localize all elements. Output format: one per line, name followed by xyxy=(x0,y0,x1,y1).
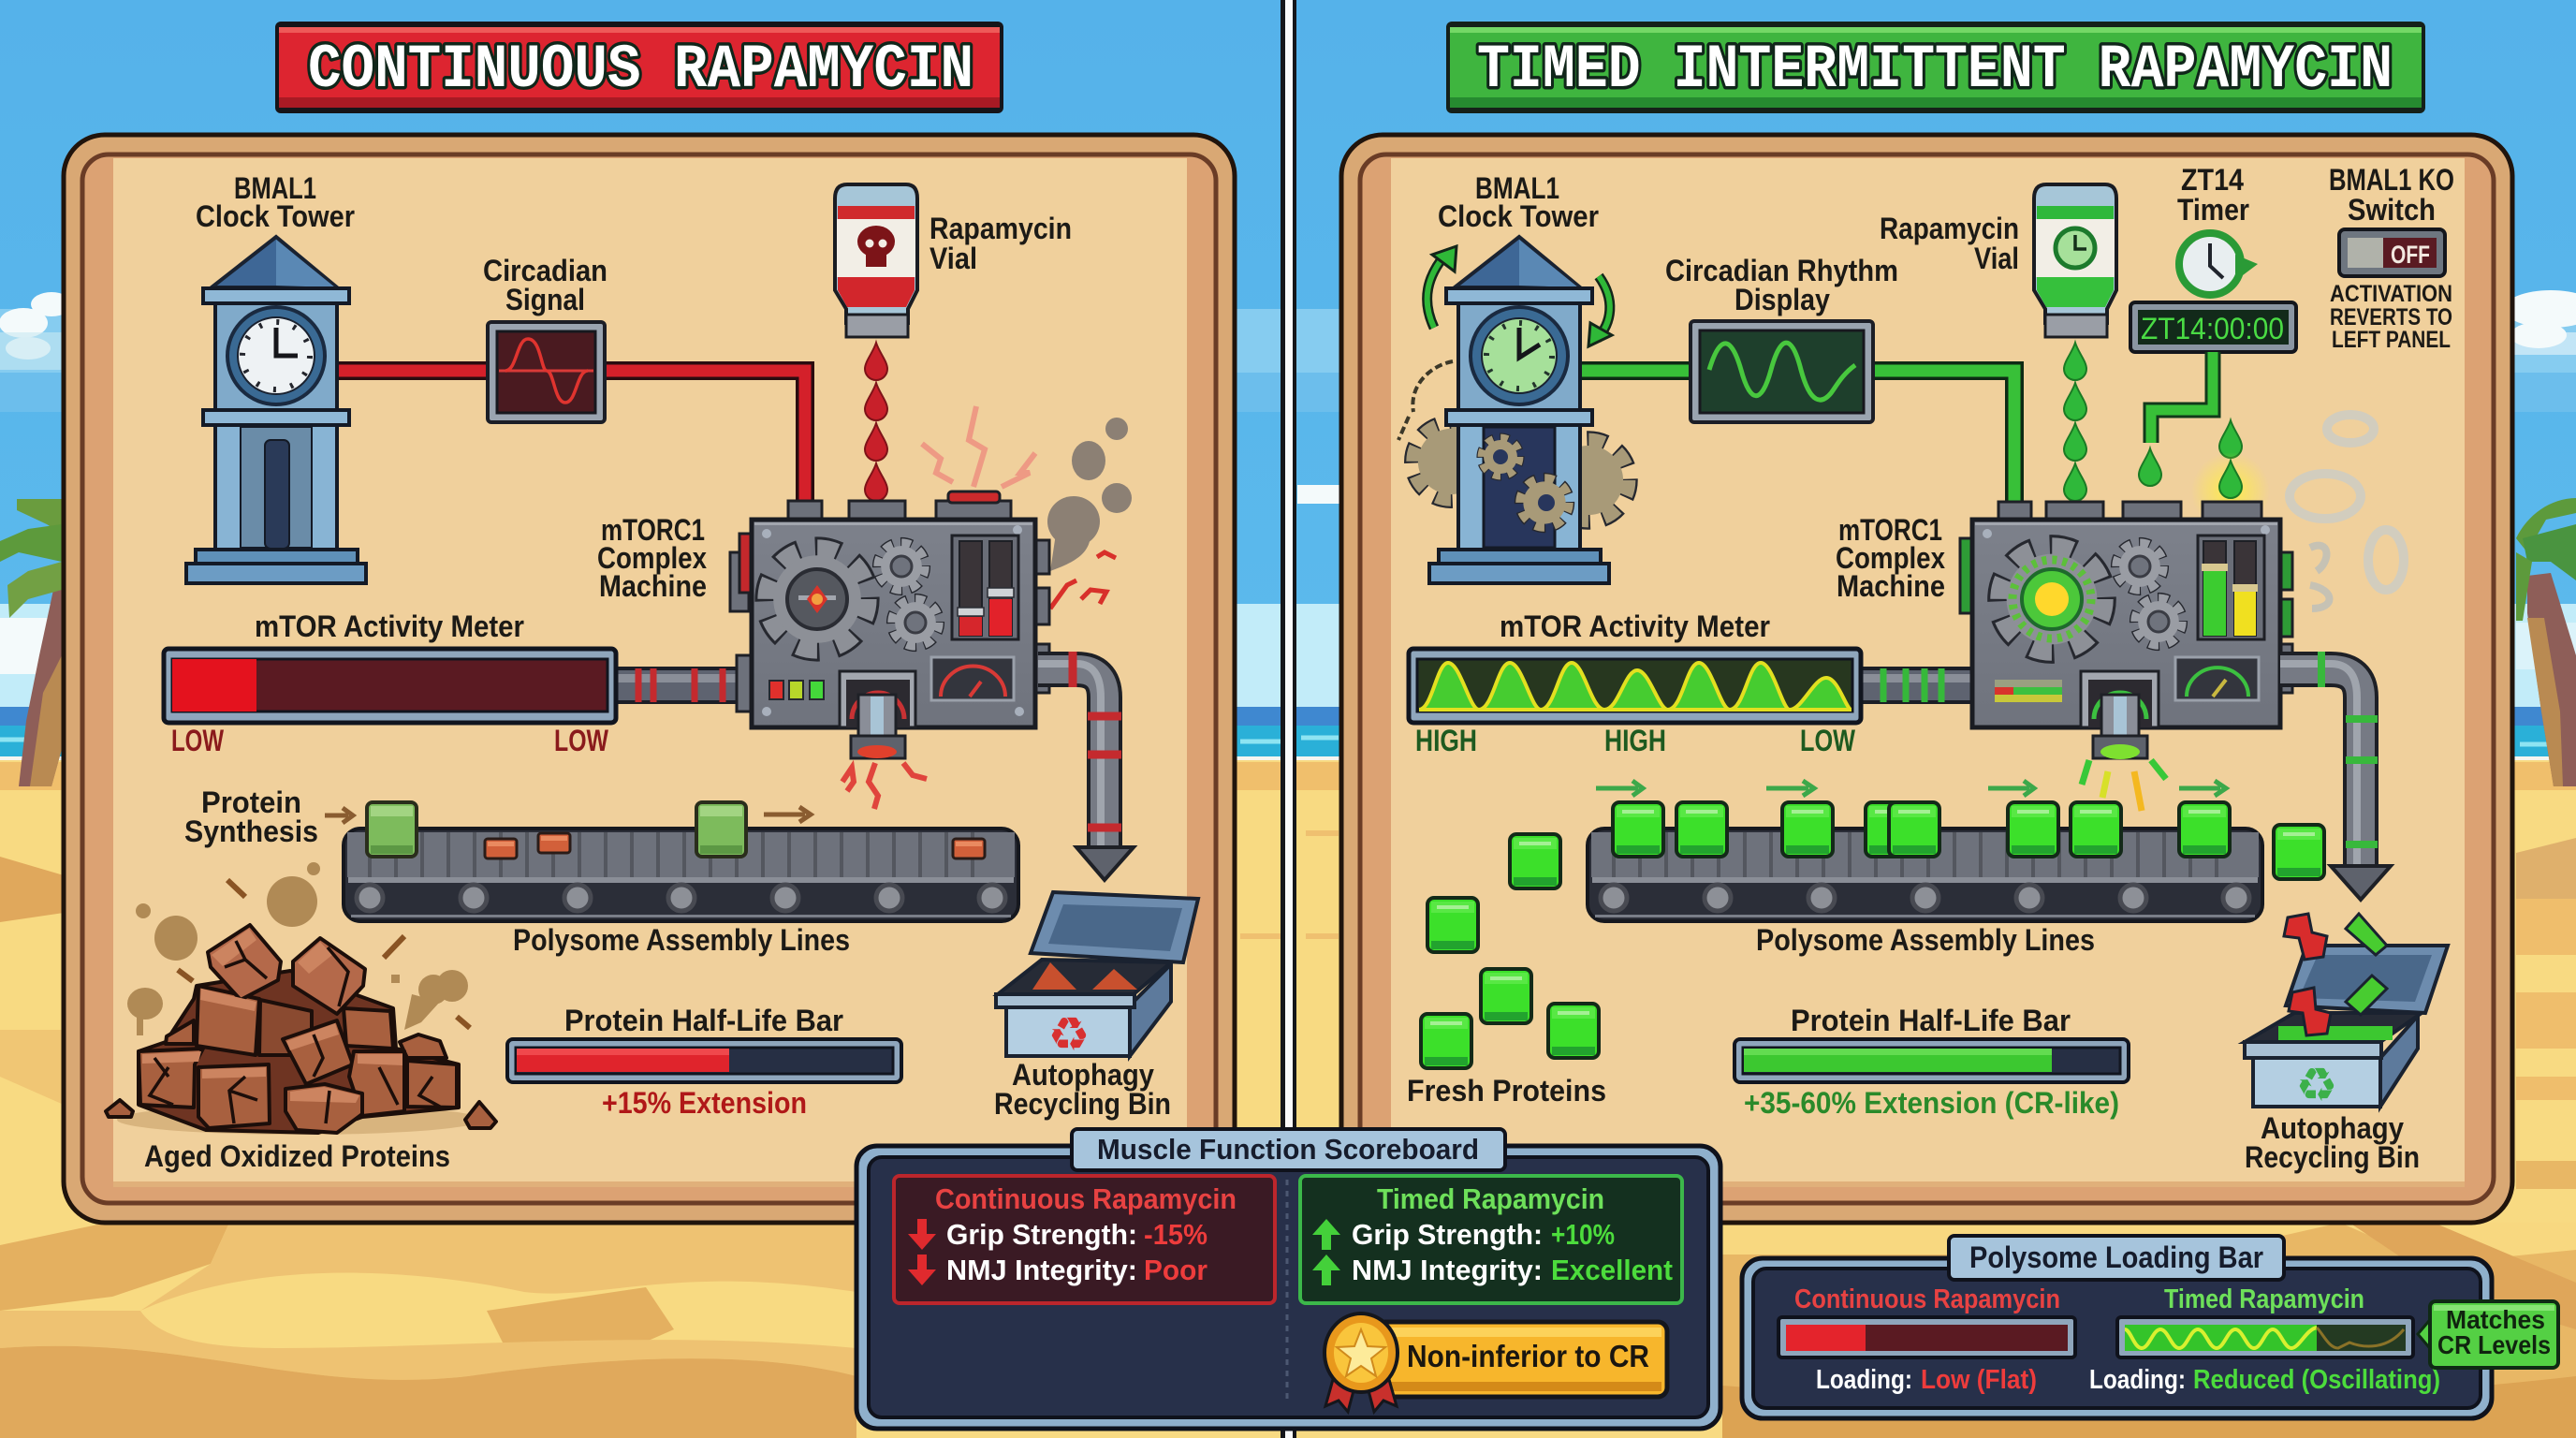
background: clouds and haze xyxy=(0,290,2576,709)
polysome tab: Polysome Loading Bar xyxy=(1969,1240,2263,1274)
sliders xyxy=(952,536,1018,639)
badge: non-inferior to CR: Non-inferior to CR xyxy=(1407,1339,1649,1373)
label: polysome assembly lines right: Polysome Assembly Lines xyxy=(1756,923,2095,957)
label: mTORC1 complex machine: mTORC1 xyxy=(601,513,705,547)
title: timed intermittent rapamycin xyxy=(1446,22,2425,113)
panel: polysome loading bar xyxy=(1742,1236,2558,1418)
label: protein synthesis xyxy=(184,785,318,848)
label: half-life extension right: +35-60% Extension (CR-like) xyxy=(1744,1086,2119,1120)
chart: circadian signal monitor xyxy=(488,322,605,422)
note: activation reverts to left panel xyxy=(2330,281,2452,353)
panel frame left xyxy=(64,135,1235,1223)
chart: continuous loading: Continuous Rapamycin xyxy=(1794,1284,2060,1314)
label: BMAL1 clock tower: Clock Tower xyxy=(196,199,355,233)
note: activation reverts to left panel: REVERTS TO xyxy=(2330,304,2452,330)
label: rapamycin vial: Rapamycin xyxy=(929,212,1072,245)
label: rapamycin vial xyxy=(929,212,1072,275)
signal wire green xyxy=(1582,371,2014,502)
label: ZT14 timer xyxy=(2177,163,2249,227)
card: timed results xyxy=(1300,1176,1682,1303)
card: continuous results: Poor xyxy=(1144,1254,1208,1286)
label: circadian rhythm display: Circadian Rhythm xyxy=(1665,254,1898,287)
conveyor: polysome assembly line xyxy=(344,802,1018,921)
icon: items falling into bin xyxy=(2284,914,2387,1035)
large proteins xyxy=(367,802,746,857)
icon: autophagy recycling bin right: ♻ xyxy=(2296,1058,2337,1112)
machine: mTORC1 complex xyxy=(730,492,1049,758)
icon: output sparks xyxy=(842,763,927,809)
status bars xyxy=(1995,680,2062,702)
big gear xyxy=(768,550,867,649)
title: continuous rapamycin xyxy=(275,22,1003,113)
icon: rapamycin vial with skull xyxy=(835,184,917,337)
chart: protein half-life bar right xyxy=(1734,1039,2129,1082)
icon: rapamycin vial with clock xyxy=(2034,184,2116,337)
label: protein half-life bar: Protein Half-Life Bar xyxy=(564,1004,843,1037)
label: fresh proteins: Fresh Proteins xyxy=(1407,1074,1606,1108)
timer readout xyxy=(2130,302,2296,352)
card: continuous results: -15% xyxy=(1144,1218,1208,1251)
label: protein half-life bar right: Protein Half-Life Bar xyxy=(1791,1004,2071,1037)
connector pipe: meter to machine xyxy=(616,668,738,702)
label: rapamycin vial right: Rapamycin xyxy=(1880,212,2019,245)
icon: rotation arrows xyxy=(1427,246,1612,346)
label: aged oxidized proteins: Aged Oxidized Proteins xyxy=(144,1139,450,1173)
panel: timed intermittent rapamycin xyxy=(1341,135,2512,1223)
nozzle xyxy=(840,671,915,758)
icon: palm tree left xyxy=(0,499,62,786)
badge: non-inferior to CR xyxy=(1325,1313,1667,1412)
card: timed results: +10% xyxy=(1551,1218,1615,1251)
icon: autophagy recycling bin left: ♻ xyxy=(1048,1007,1090,1062)
background: sky xyxy=(0,0,2576,712)
label: BMAL1 KO switch: BMAL1 KO xyxy=(2329,163,2454,197)
gauge active xyxy=(2175,657,2259,700)
label: low: LOW xyxy=(171,724,225,757)
label: mTORC1 complex machine xyxy=(597,513,707,603)
label: BMAL1 clock tower right xyxy=(1438,171,1599,233)
chart: mTOR activity meter xyxy=(164,649,616,723)
chart: timed loading: Timed Rapamycin xyxy=(2164,1284,2364,1314)
label: autophagy recycling bin xyxy=(994,1058,1171,1121)
icon: aged oxidized protein pile xyxy=(106,862,496,1135)
chart: timed loading: Loading: xyxy=(2089,1365,2186,1395)
card: timed results: NMJ Integrity: xyxy=(1352,1254,1543,1286)
chart: continuous loading xyxy=(1778,1284,2075,1395)
icon: output sparks green xyxy=(2082,760,2166,811)
label: high mid: HIGH xyxy=(1604,724,1666,757)
icon: sparks and smoke xyxy=(922,406,1132,609)
icon: green drops xyxy=(2064,343,2242,501)
title: continuous rapamycin: CONTINUOUS RAPAMYCIN xyxy=(308,35,973,105)
card: continuous results: Grip Strength: xyxy=(946,1218,1137,1251)
panel: continuous rapamycin xyxy=(64,135,1235,1223)
icon: palm tree right xyxy=(2516,498,2576,786)
small gears active xyxy=(2116,543,2182,645)
label: autophagy recycling bin right xyxy=(2245,1111,2420,1174)
center divider xyxy=(1281,0,1296,1438)
timer readout: ZT14:00:00 xyxy=(2141,312,2284,345)
chart: timed loading: Reduced (Oscillating) xyxy=(2193,1365,2440,1395)
icon: red drops xyxy=(865,343,887,501)
label: half-life extension: +15% Extension xyxy=(602,1086,807,1120)
note: activation reverts to left panel: LEFT PANEL xyxy=(2332,327,2451,353)
label: autophagy recycling bin right: Autophagy xyxy=(2261,1111,2404,1145)
title: timed intermittent rapamycin: TIMED INTERMITTENT RAPAMYCIN xyxy=(1477,35,2393,105)
label: mTORC1 complex machine: Machine xyxy=(599,569,707,603)
label: mTOR activity meter right: mTOR Activity Meter xyxy=(1500,609,1770,643)
callout: matches CR levels xyxy=(2418,1301,2558,1368)
label: mTOR activity meter: mTOR Activity Meter xyxy=(255,609,524,643)
card: timed results: Excellent xyxy=(1551,1254,1673,1286)
gauge xyxy=(931,657,1014,700)
label: circadian signal: Circadian xyxy=(483,254,607,287)
label: autophagy recycling bin: Autophagy xyxy=(1012,1058,1154,1092)
icon: fresh proteins xyxy=(1421,834,1599,1068)
icon: ZT14 timer clock xyxy=(2179,233,2258,295)
icon: fading ribosome rings xyxy=(2290,415,2404,609)
protein leaving conveyor xyxy=(2274,825,2324,879)
glow at active port xyxy=(2191,452,2270,531)
label: rapamycin vial: Vial xyxy=(929,242,977,275)
label: circadian signal xyxy=(483,254,607,316)
label: mTORC1 complex machine right: mTORC1 xyxy=(1838,513,1942,547)
card: timed results: Timed Rapamycin xyxy=(1377,1182,1604,1215)
label: mTORC1 complex machine right: Machine xyxy=(1837,569,1945,603)
arrows: conveyor direction xyxy=(325,807,811,823)
big gear active xyxy=(2000,548,2103,651)
chart: circadian rhythm display xyxy=(1690,321,1873,422)
connector pipe right xyxy=(1861,668,1972,702)
label: mTORC1 complex machine right: Complex xyxy=(1836,541,1945,575)
label: polysome assembly lines: Polysome Assembly Lines xyxy=(513,923,850,957)
label: circadian rhythm display: Display xyxy=(1734,283,1830,316)
background: sand dunes xyxy=(0,760,2576,1438)
panel: muscle function scoreboard xyxy=(856,1129,1720,1429)
signal wire xyxy=(339,371,805,502)
label: ZT14 timer: Timer xyxy=(2177,193,2249,227)
arrows: conveyor direction green xyxy=(1596,781,2226,796)
label: mTORC1 complex machine: Complex xyxy=(597,541,707,575)
pipe to recycling bin xyxy=(1038,652,1134,880)
chart: continuous loading: Loading: xyxy=(1816,1365,1912,1395)
label: ZT14 timer: ZT14 xyxy=(2181,163,2244,197)
nozzle active xyxy=(2081,671,2159,759)
label: high: HIGH xyxy=(1415,724,1477,757)
label: BMAL1 clock tower xyxy=(196,171,355,233)
scoreboard tab: Muscle Function Scoreboard xyxy=(1097,1133,1479,1166)
label: BMAL1 clock tower: BMAL1 xyxy=(234,171,316,205)
chart: mTOR activity meter oscillating xyxy=(1409,649,1861,723)
icon: clock tower with dark core xyxy=(1429,237,1609,583)
label: protein synthesis: Synthesis xyxy=(184,814,318,848)
label: autophagy recycling bin: Recycling Bin xyxy=(994,1087,1171,1121)
icon: off switch: OFF xyxy=(2391,241,2430,269)
chart: continuous loading: Low (Flat) xyxy=(1921,1365,2037,1395)
icon: autophagy recycling bin right xyxy=(2245,946,2448,1112)
card: continuous results: NMJ Integrity: xyxy=(946,1254,1137,1286)
label: BMAL1 KO switch xyxy=(2329,163,2454,227)
conveyor: polysome assembly line active xyxy=(1588,802,2262,921)
icon: broken gears behind tower xyxy=(1398,361,1628,520)
icon: BMAL1 clock tower xyxy=(186,237,366,583)
indicator lights xyxy=(769,681,824,699)
label: low end: LOW xyxy=(554,724,609,757)
icon: autophagy recycling bin left xyxy=(996,892,1198,1062)
small gears xyxy=(878,543,939,646)
chart: timed loading xyxy=(2089,1284,2440,1395)
proteins on line xyxy=(1613,802,2230,857)
pipe to recycling bin right xyxy=(2280,652,2391,900)
machine: mTORC1 complex active xyxy=(1960,502,2292,759)
label: mTORC1 complex machine right xyxy=(1836,513,1945,603)
small protein fragments xyxy=(485,833,985,858)
label: circadian rhythm display xyxy=(1665,254,1898,316)
icon: glowing drop xyxy=(2219,461,2242,498)
label: circadian signal: Signal xyxy=(505,283,585,316)
sliders active xyxy=(2198,536,2264,639)
note: activation reverts to left panel: ACTIVATION xyxy=(2330,281,2452,307)
panel frame right xyxy=(1341,135,2512,1223)
label: autophagy recycling bin right: Recycling Bin xyxy=(2245,1140,2420,1174)
label: BMAL1 clock tower right: Clock Tower xyxy=(1438,199,1599,233)
label: BMAL1 clock tower right: BMAL1 xyxy=(1475,171,1559,205)
card: continuous results xyxy=(894,1176,1275,1303)
card: continuous results: Continuous Rapamycin xyxy=(935,1182,1237,1215)
label: BMAL1 KO switch: Switch xyxy=(2348,193,2436,227)
chart: protein half-life bar left xyxy=(507,1039,901,1082)
icon: off switch xyxy=(2339,229,2445,276)
label: rapamycin vial right xyxy=(1880,212,2019,275)
label: rapamycin vial right: Vial xyxy=(1974,242,2019,275)
label: protein synthesis: Protein xyxy=(201,785,301,819)
background: sea xyxy=(0,707,2576,762)
callout: matches CR levels: CR Levels xyxy=(2437,1330,2551,1359)
label: low right: LOW xyxy=(1800,724,1856,757)
card: timed results: Grip Strength: xyxy=(1352,1218,1543,1251)
timer wire xyxy=(2151,352,2213,443)
callout: matches CR levels: Matches xyxy=(2446,1305,2545,1334)
